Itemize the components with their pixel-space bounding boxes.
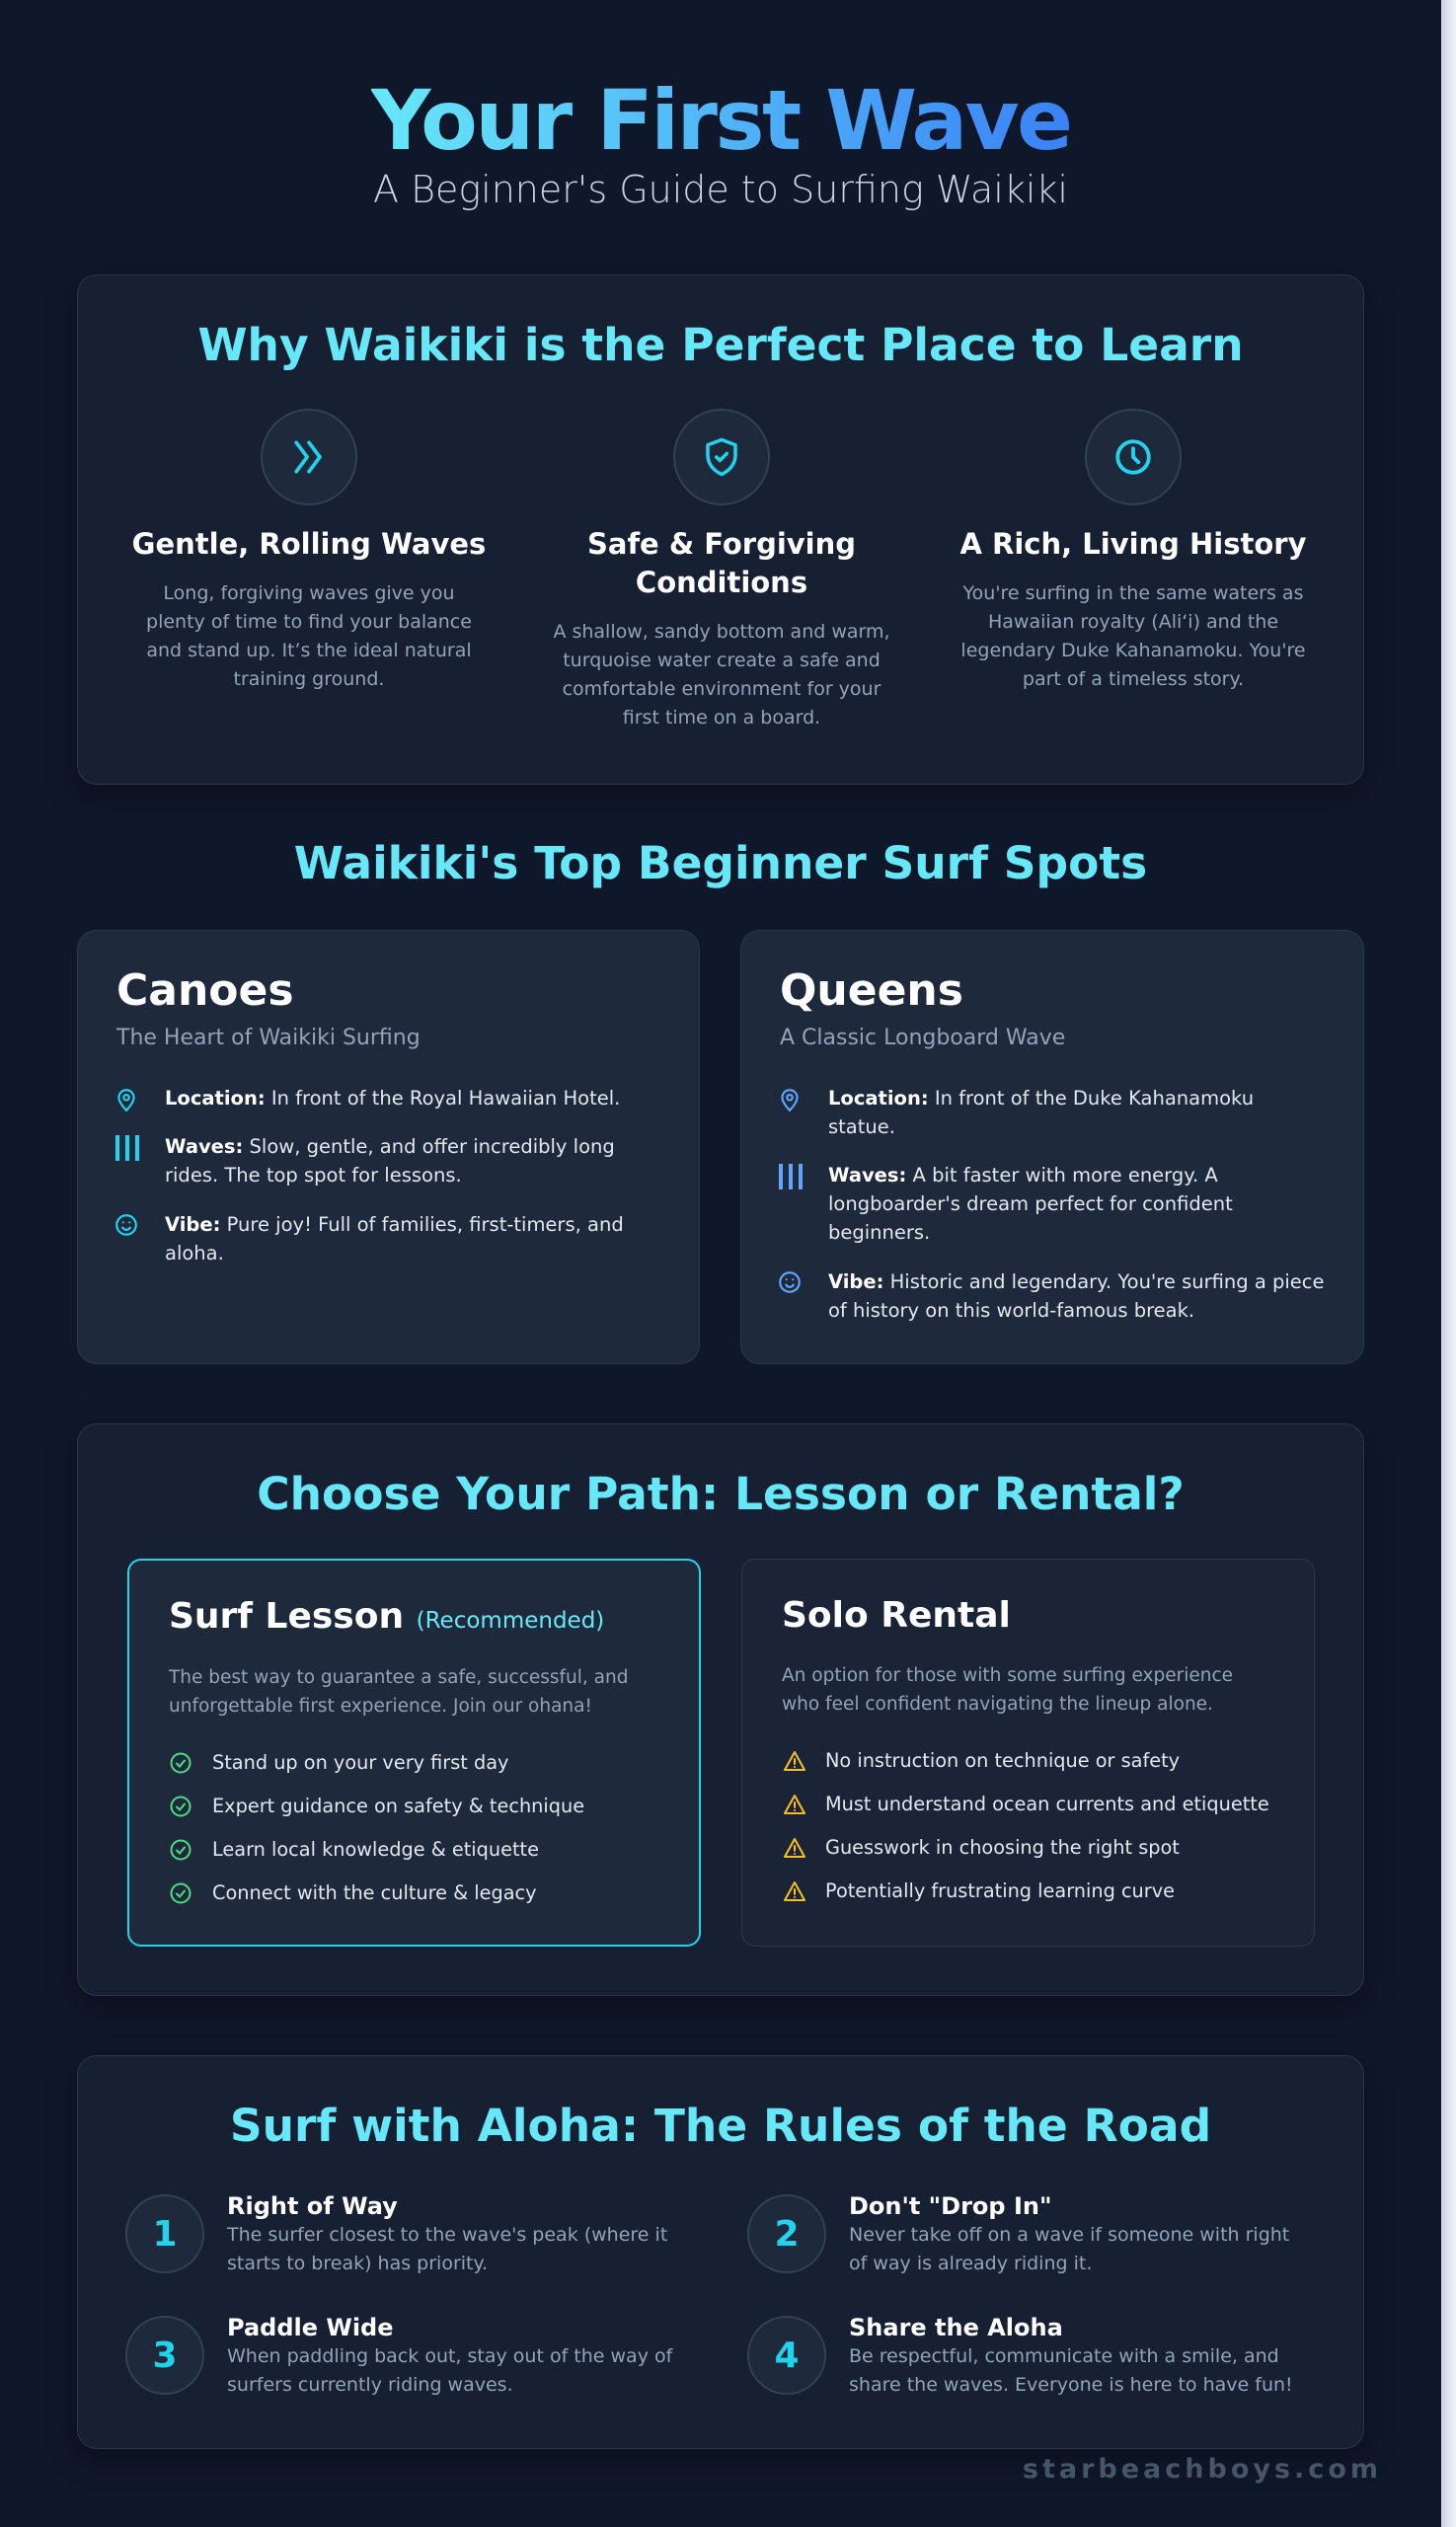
rule 4: Share the Aloha: [849, 2314, 1063, 2341]
rule 2: Don't "Drop In": [849, 2192, 1051, 2220]
rule 1: The surfer closest to the wave's peak (where it starts to break) has priority.: [227, 2224, 667, 2274]
rental drawbacks list: No instruction on technique or safety: [825, 1749, 1180, 1772]
rental drawbacks list: [784, 1749, 1269, 1902]
item: vibe: Vibe: Pure joy! Full of families, first-timers, and aloha.: [165, 1213, 624, 1264]
rental drawbacks list: Guesswork in choosing the right spot: [825, 1836, 1180, 1859]
item: waves: Waves: Slow, gentle, and offer incredibly long rides. The top spot for lessons.: [165, 1135, 615, 1187]
heading: choose your path: Choose Your Path: Lesson or Rental?: [257, 1468, 1185, 1520]
column: gentle waves: Gentle, Rolling Waves: [132, 527, 486, 561]
heading: why waikiki: Why Waikiki is the Perfect Place to Learn: [197, 319, 1244, 371]
rental title: Solo Rental: [782, 1595, 1011, 1636]
heading: surf with aloha: Surf with Aloha: The Rules of the Road: [230, 2100, 1211, 2152]
footer: website: starbeachboys.com: [1023, 2454, 1382, 2485]
rule 3: [125, 2314, 673, 2396]
lesson benefits list: Learn local knowledge & etiquette: [212, 1838, 539, 1861]
lesson description: The best way to guarantee a safe, successful, and unforgettable first experience. Join our ohana!: [169, 1667, 628, 1717]
item: location: Location: In front of the Duke Kahanamoku statue.: [828, 1087, 1254, 1138]
rule 3: Paddle Wide: [227, 2314, 394, 2341]
canoes title: Canoes: [116, 965, 294, 1016]
item: waves: Waves: A bit faster with more energy. A longboarder's dream perfect for confident beginners.: [828, 1164, 1233, 1244]
card: canoes: [77, 930, 700, 1364]
lesson benefits list: [170, 1751, 584, 1904]
item: location: Location: In front of the Royal Hawaiian Hotel.: [165, 1087, 620, 1110]
lesson title: Surf Lesson (Recommended): [169, 1596, 604, 1637]
rule 3: When paddling back out, stay out of the way of surfers currently riding waves.: [227, 2345, 672, 2396]
column: history: You're surfing in the same waters as Hawaiian royalty (Ali‘i) and the legendary Duke Kahanamoku. You're part of a timeless story.: [960, 582, 1306, 690]
subtitle: A Beginner's Guide to Surfing Waikiki: [373, 168, 1068, 211]
column: gentle waves: Long, forgiving waves give you plenty of time to find your balance and stand up. It’s the ideal natural training ground.: [146, 582, 472, 690]
title: Your First Wave: [371, 72, 1070, 169]
rule 1: 1: [152, 2213, 178, 2255]
icon: clock: [1085, 409, 1182, 505]
rule 2: [747, 2192, 1289, 2274]
rule 1: [125, 2192, 667, 2274]
rule 2: 2: [774, 2213, 800, 2255]
panel: rules: [77, 2055, 1364, 2449]
card: solo rental: [741, 1559, 1315, 1947]
lesson benefits list: Connect with the culture & legacy: [212, 1881, 537, 1904]
rule 4: [747, 2314, 1293, 2396]
column: history: A Rich, Living History: [959, 527, 1307, 561]
lesson benefits list: Expert guidance on safety & technique: [212, 1795, 584, 1817]
panel: lesson or rental: [77, 1423, 1364, 1996]
card: queens: [740, 930, 1364, 1364]
column: safe conditions: Safe & Forgiving Conditions: [587, 527, 856, 599]
item: vibe: Vibe: Historic and legendary. You're surfing a piece of history on this world-famous break.: [828, 1270, 1325, 1322]
column: history: [959, 527, 1307, 690]
rule 2: Never take off on a wave if someone with right of way is already riding it.: [849, 2224, 1289, 2274]
canoes subtitle: The Heart of Waikiki Surfing: [116, 1026, 421, 1050]
rental description: An option for those with some surfing experience who feel confident navigating the lineup alone.: [782, 1665, 1233, 1715]
queens title: Queens: [780, 965, 963, 1016]
rule 4: Be respectful, communicate with a smile, and share the waves. Everyone is here to have fun!: [849, 2345, 1293, 2396]
heading: surf spots: Waikiki's Top Beginner Surf Spots: [294, 837, 1147, 889]
rule 3: 3: [152, 2336, 178, 2375]
rule 4: 4: [774, 2336, 800, 2375]
column: gentle waves: [132, 527, 486, 690]
icon: chevrons: [261, 409, 357, 505]
panel: why waikiki: [77, 274, 1364, 785]
icon: shield: [673, 409, 770, 505]
column: safe conditions: [553, 527, 890, 728]
column: safe conditions: A shallow, sandy bottom and warm, turquoise water create a safe and comfortable environment for your first time on a board.: [553, 621, 890, 728]
rule 1: Right of Way: [227, 2192, 398, 2220]
card: surf lesson: [127, 1559, 701, 1947]
right edge strip: [1441, 0, 1456, 2527]
queens subtitle: A Classic Longboard Wave: [780, 1026, 1065, 1050]
lesson benefits list: Stand up on your very first day: [212, 1751, 508, 1774]
rental drawbacks list: Potentially frustrating learning curve: [825, 1879, 1175, 1902]
rental drawbacks list: Must understand ocean currents and etiquette: [825, 1793, 1269, 1815]
